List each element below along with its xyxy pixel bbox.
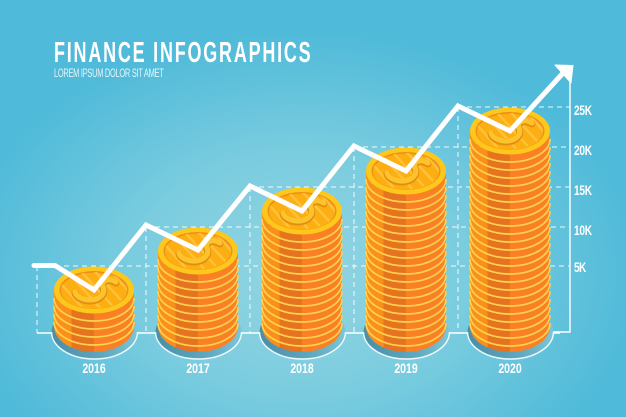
coin stack 2018 [262, 187, 348, 352]
title: FINANCE INFOGRAPHICS [54, 37, 311, 69]
year labels: 2020 [498, 361, 522, 376]
coin stack 2020 [470, 107, 556, 352]
year labels: 2018 [290, 361, 314, 376]
value axis labels: 25K [574, 102, 592, 118]
coin stack 2019 [366, 147, 452, 352]
stack shadows and rings [52, 305, 554, 359]
value axis labels: 15K [574, 182, 592, 198]
year labels: 2017 [186, 361, 210, 376]
year labels: 2016 [82, 361, 106, 376]
chart axes and dashed grid [37, 72, 570, 333]
value axis labels: 10K [574, 222, 592, 238]
value axis labels: 20K [574, 142, 592, 158]
value axis labels: 5K [574, 259, 586, 275]
growth arrow [34, 65, 573, 290]
subtitle: LOREM IPSUM DOLOR SIT AMET [54, 67, 164, 81]
value axis labels [574, 102, 592, 275]
coin stack 2016 [54, 266, 140, 352]
year labels: 2019 [394, 361, 418, 376]
year labels [82, 361, 522, 376]
coin stack 2017 [158, 227, 244, 352]
